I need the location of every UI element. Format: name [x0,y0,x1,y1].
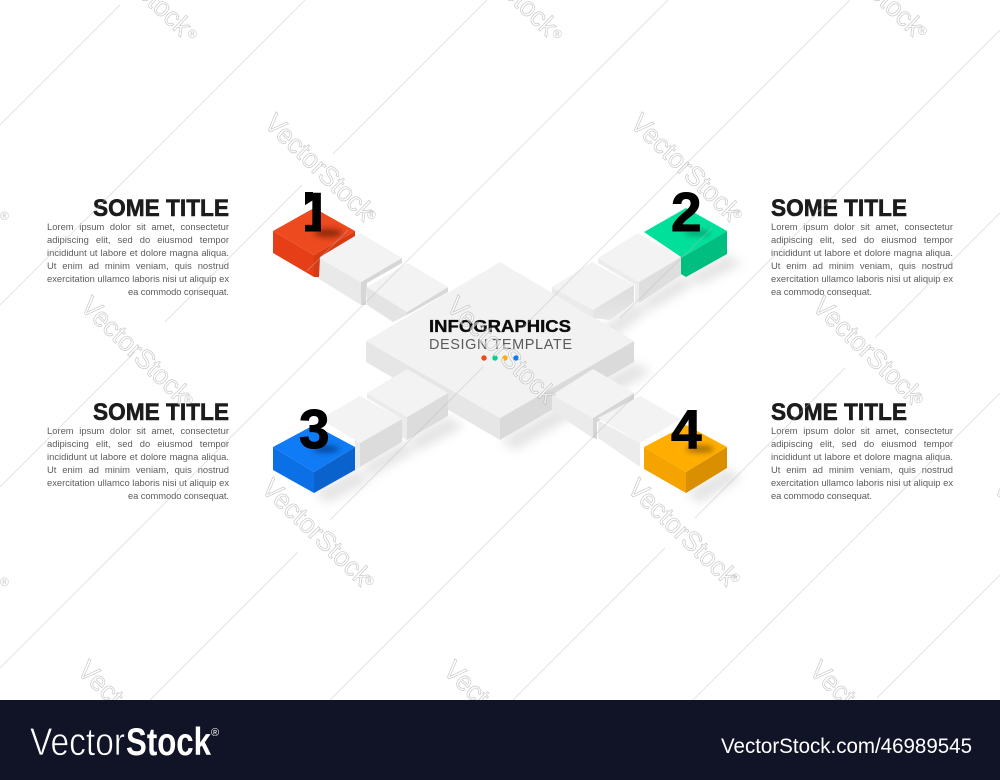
watermark overlay: ® [184,393,193,407]
block 3 blue [273,425,355,493]
text block: top right [771,195,953,297]
text block: bottom left: SOME TITLE [93,399,229,426]
watermark overlay: VectorStock [625,108,747,227]
text block: top left: exercitation ullamco laboris nisi ut aliquip ex [47,273,229,284]
footer logo [30,721,219,764]
watermark overlay: VectorStock [622,473,744,592]
central isometric platform [366,262,634,440]
watermark overlay: ® [553,27,562,41]
block 1 red [273,208,355,277]
cast shadows [314,254,742,503]
text block: top left: incididunt ut labore et dolore magna aliqua. [47,247,229,258]
text block: bottom right: adipiscing elit, sed do eiusmod tempor [771,438,953,449]
text block: bottom right: Lorem ipsum dolor sit amet, consectetur [771,425,953,436]
watermark overlay: ® [0,209,9,223]
watermark overlay: ® [367,208,376,222]
text block: top left: Ut enim ad minim veniam, quis nostrud [47,260,229,271]
watermark overlay: ® [365,574,374,588]
block 2 green [644,208,727,277]
text block: bottom right: SOME TITLE [771,399,907,426]
watermark overlay: ® [731,571,740,585]
number 3: 3 [299,398,330,460]
watermark overlay: VectorStock [441,291,563,410]
center colour dots [481,355,519,361]
text block: top left [47,195,229,297]
watermark overlay: VectorStock [438,655,560,774]
text block: bottom right: ea commodo consequat. [771,490,872,501]
text block: bottom left: Ut enim ad minim veniam, quis nostrud [47,464,229,475]
watermark overlay: ® [0,575,9,589]
number 1 [305,192,321,232]
footer image id: VectorStock.com/46989545 [721,735,972,758]
watermark overlay: VectorStock [75,291,197,410]
text block: top right: ea commodo consequat. [771,286,872,297]
text block: bottom left [47,399,229,501]
text block: bottom left: ea commodo consequat. [128,490,229,501]
watermark overlay: ® [188,27,197,41]
text block: bottom left: exercitation ullamco laboris nisi ut aliquip ex [47,477,229,488]
text block: top left: Lorem ipsum dolor sit amet, consectetur [47,221,229,232]
connector steps to block 1 [316,233,448,322]
footer logo: Vector [30,721,125,764]
watermark overlay: VectorStock [256,473,378,592]
watermark overlay: VectorStock [804,655,926,774]
number 1: 1 [300,181,331,243]
block 4 yellow [644,425,727,493]
footer logo: Stock [126,721,211,764]
text block: bottom right: Ut enim ad minim veniam, quis nostrud [771,464,953,475]
watermark overlay: ® [918,24,927,38]
center heading [429,316,572,353]
connector steps to block 3 [320,369,448,470]
text block: top right: exercitation ullamco laboris nisi ut aliquip ex [771,273,953,284]
text block: bottom right: exercitation ullamco laboris nisi ut aliquip ex [771,477,953,488]
text block: bottom left: adipiscing elit, sed do eiusmod tempor [47,438,229,449]
footer bar [0,700,1000,780]
text block: top right: adipiscing elit, sed do eiusmod tempor [771,234,953,245]
center heading: DESIGN TEMPLATE [429,337,572,353]
text block: top right: incididunt ut labore et dolore magna aliqua. [771,247,953,258]
text block: top left: adipiscing elit, sed do eiusmod tempor [47,234,229,245]
watermark overlay: ® [733,207,742,221]
watermark overlay: ® [914,392,923,406]
text block: top left: SOME TITLE [93,195,229,222]
text block: bottom left: incididunt ut labore et dolore magna aliqua. [47,451,229,462]
text block: top right: Ut enim ad minim veniam, quis nostrud [771,260,953,271]
connector steps to block 2 [552,233,681,320]
watermark overlay: VectorStock [807,291,929,410]
watermark overlay: VectorStock [259,108,381,227]
connector steps to block 4 [552,369,681,467]
text block: bottom left: Lorem ipsum dolor sit amet, consectetur [47,425,229,436]
footer logo: ® [211,727,219,739]
text block: bottom right: incididunt ut labore et dolore magna aliqua. [771,451,953,462]
center heading: INFOGRAPHICS [429,316,571,336]
text block: top left: ea commodo consequat. [128,286,229,297]
text block: bottom right [771,399,953,501]
text block: top right: Lorem ipsum dolor sit amet, consectetur [771,221,953,232]
watermark overlay: VectorStock [72,655,194,774]
number 2: 2 [671,181,702,243]
number 4: 4 [671,398,702,460]
text block: top right: SOME TITLE [771,195,907,222]
